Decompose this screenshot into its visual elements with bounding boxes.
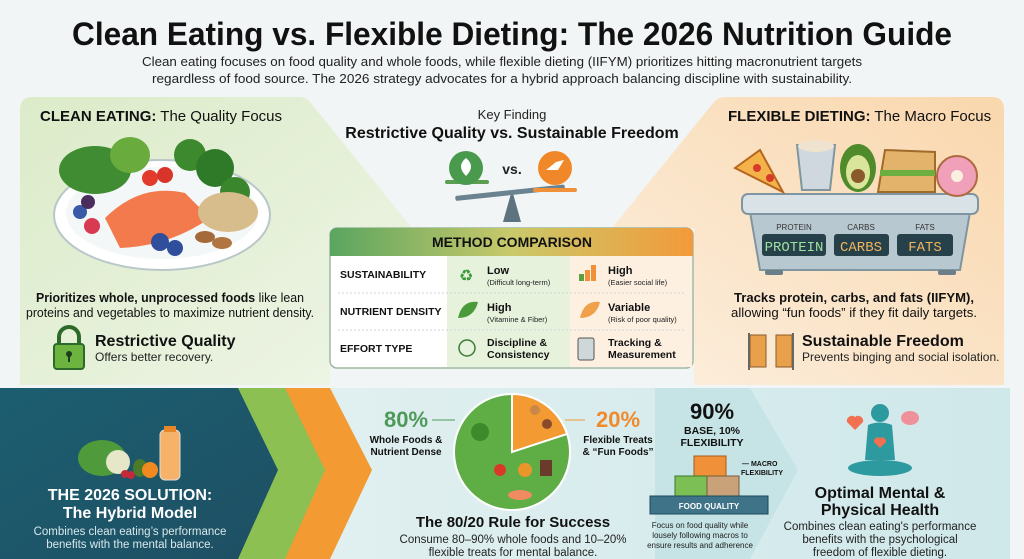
panel: optimal health: freedom of flexible dieting. [813, 547, 947, 559]
key finding: Restrictive Quality vs. Sustainable Freedom [345, 125, 679, 142]
icon: balance scale [445, 151, 577, 222]
flexible dieting column: (Easier social life) [608, 278, 668, 287]
stat: 80%: 80% [384, 407, 428, 432]
subtitle: Clean eating focuses on food quality and whole foods, while flexible dieting (IIFYM) prioritizes hitting macronutrient targets [142, 54, 863, 69]
callout: sustainable freedom [802, 333, 999, 364]
illustration: building blocks: FLEXIBILITY [741, 470, 783, 477]
subtitle: regardless of food source. The 2026 strategy advocates for a hybrid approach balancing discipline with sustainability. [152, 71, 852, 86]
callout: restrictive quality [95, 333, 236, 364]
illustration: food scale [735, 140, 978, 275]
row labels: NUTRIENT DENSITY [340, 306, 442, 318]
panel: optimal health: Physical Health [821, 502, 939, 519]
panel: 90% base: 90% [690, 399, 734, 424]
clean eating column: ♻ [459, 268, 473, 285]
callout: restrictive quality: Offers better recovery. [95, 350, 213, 364]
panel: flexible dieting [612, 97, 1004, 385]
text: flexible dieting description [731, 290, 977, 320]
illustration: food scale: PROTEIN [776, 223, 812, 232]
stat: 20%: & “Fun Foods” [582, 447, 654, 458]
text: clean eating description [26, 290, 314, 320]
illustration: food scale: FATS [908, 240, 942, 256]
stat: 80% [370, 407, 442, 458]
row labels: EFFORT TYPE [340, 343, 412, 355]
row labels [340, 269, 442, 355]
panel: optimal health: Optimal Mental & [815, 485, 946, 502]
arrow: orange chevron [278, 388, 372, 559]
panel: 90% base: ensure results and adherence [647, 541, 753, 550]
text: hybrid description [34, 526, 226, 551]
illustration: vegetables and juice [78, 426, 180, 480]
panel: 90% base: BASE, 10% [684, 425, 741, 437]
illustration: building blocks: FOOD QUALITY [679, 502, 740, 511]
flexible dieting column: (Risk of poor quality) [608, 315, 677, 324]
illustration: food scale: PROTEIN [765, 240, 823, 256]
flexible dieting column: Variable [608, 302, 650, 314]
callout: sustainable freedom: Prevents binging and social isolation. [802, 350, 999, 364]
flexible dieting column: Tracking & [608, 337, 662, 349]
key finding [345, 107, 679, 142]
clean eating column: Consistency [487, 349, 550, 361]
stat: 20%: Flexible Treats [583, 435, 653, 446]
heading: 80/20 rule [400, 514, 626, 559]
clean eating column: High [487, 302, 512, 314]
panel: 90% base: FLEXIBILITY [680, 437, 744, 449]
flexible dieting column: Measurement [608, 349, 676, 361]
illustration: healthy plate [54, 137, 270, 270]
text: hybrid description: Combines clean eating’s performance [34, 526, 226, 538]
bottom band background [0, 388, 1010, 559]
table: method comparison [330, 228, 693, 368]
text: flexible dieting description: Tracks protein, carbs, and fats (IIFYM), [734, 290, 974, 305]
illustration: food scale: CARBS [847, 223, 875, 232]
panel: 90% base [647, 388, 798, 559]
clean eating column: Discipline & [487, 337, 548, 349]
heading: flexible dieting: FLEXIBLE DIETING: The Macro Focus [728, 108, 991, 125]
icon: lock [54, 327, 84, 369]
icon: open gate [748, 333, 794, 370]
flexible dieting column [578, 265, 677, 361]
text: clean eating description: proteins and vegetables to maximize nutrient density. [26, 305, 314, 320]
chart: 80/20 pie [432, 394, 585, 510]
heading: clean eating: CLEAN EATING: The Quality Focus [40, 108, 282, 125]
clean eating column: Low [487, 265, 509, 277]
panel: optimal health: benefits with the psychological [802, 534, 958, 546]
clean eating column: (Vitamine & Fiber) [487, 315, 548, 324]
icon: balance scale: vs. [502, 161, 522, 177]
heading: 80/20 rule: Consume 80–90% whole foods and 10–20% [400, 534, 626, 546]
text: flexible dieting description: allowing “fun foods” if they fit daily targets. [731, 305, 977, 320]
heading: 80/20 rule: The 80/20 Rule for Success [416, 514, 610, 531]
title: Clean Eating vs. Flexible Dieting: The 2026 Nutrition Guide [72, 16, 952, 52]
panel: optimal health [784, 404, 976, 559]
panel: 90% base: lousely following macros to [652, 531, 748, 540]
stat: 80%: Whole Foods & [370, 435, 442, 446]
panel: 90% base: Focus on food quality while [652, 521, 749, 530]
clean eating column: (Difficult long-term) [487, 278, 551, 287]
callout: sustainable freedom: Sustainable Freedom [802, 333, 964, 350]
text: clean eating description: Prioritizes whole, unprocessed foods like lean [36, 290, 304, 305]
heading: 2026 solution [48, 487, 212, 522]
subtitle [142, 54, 863, 86]
callout: restrictive quality: Restrictive Quality [95, 333, 236, 350]
flexible dieting column: High [608, 265, 633, 277]
heading: 2026 solution: THE 2026 SOLUTION: [48, 487, 212, 504]
key finding: Key Finding [478, 107, 546, 122]
illustration: food scale: CARBS [840, 240, 882, 256]
stat: 20% [582, 407, 654, 458]
heading: 80/20 rule: flexible treats for mental balance. [429, 547, 597, 559]
table header: METHOD COMPARISON [432, 234, 592, 250]
text: hybrid description: benefits with the mental balance. [46, 539, 214, 551]
panel: optimal health: Combines clean eating's performance [784, 521, 976, 533]
illustration: building blocks [650, 456, 783, 514]
illustration: building blocks: — MACRO [742, 461, 778, 468]
heading: 2026 solution: The Hybrid Model [63, 505, 197, 522]
icon: meditating person [847, 404, 919, 476]
arrow: green chevron [230, 388, 325, 559]
illustration: food scale: FATS [915, 223, 935, 232]
row labels: SUSTAINABILITY [340, 269, 426, 281]
clean eating column [458, 265, 551, 361]
stat: 20%: 20% [596, 407, 640, 432]
stat: 80%: Nutrient Dense [370, 447, 442, 458]
panel: hybrid model [0, 388, 278, 559]
panel: clean eating [20, 97, 412, 385]
